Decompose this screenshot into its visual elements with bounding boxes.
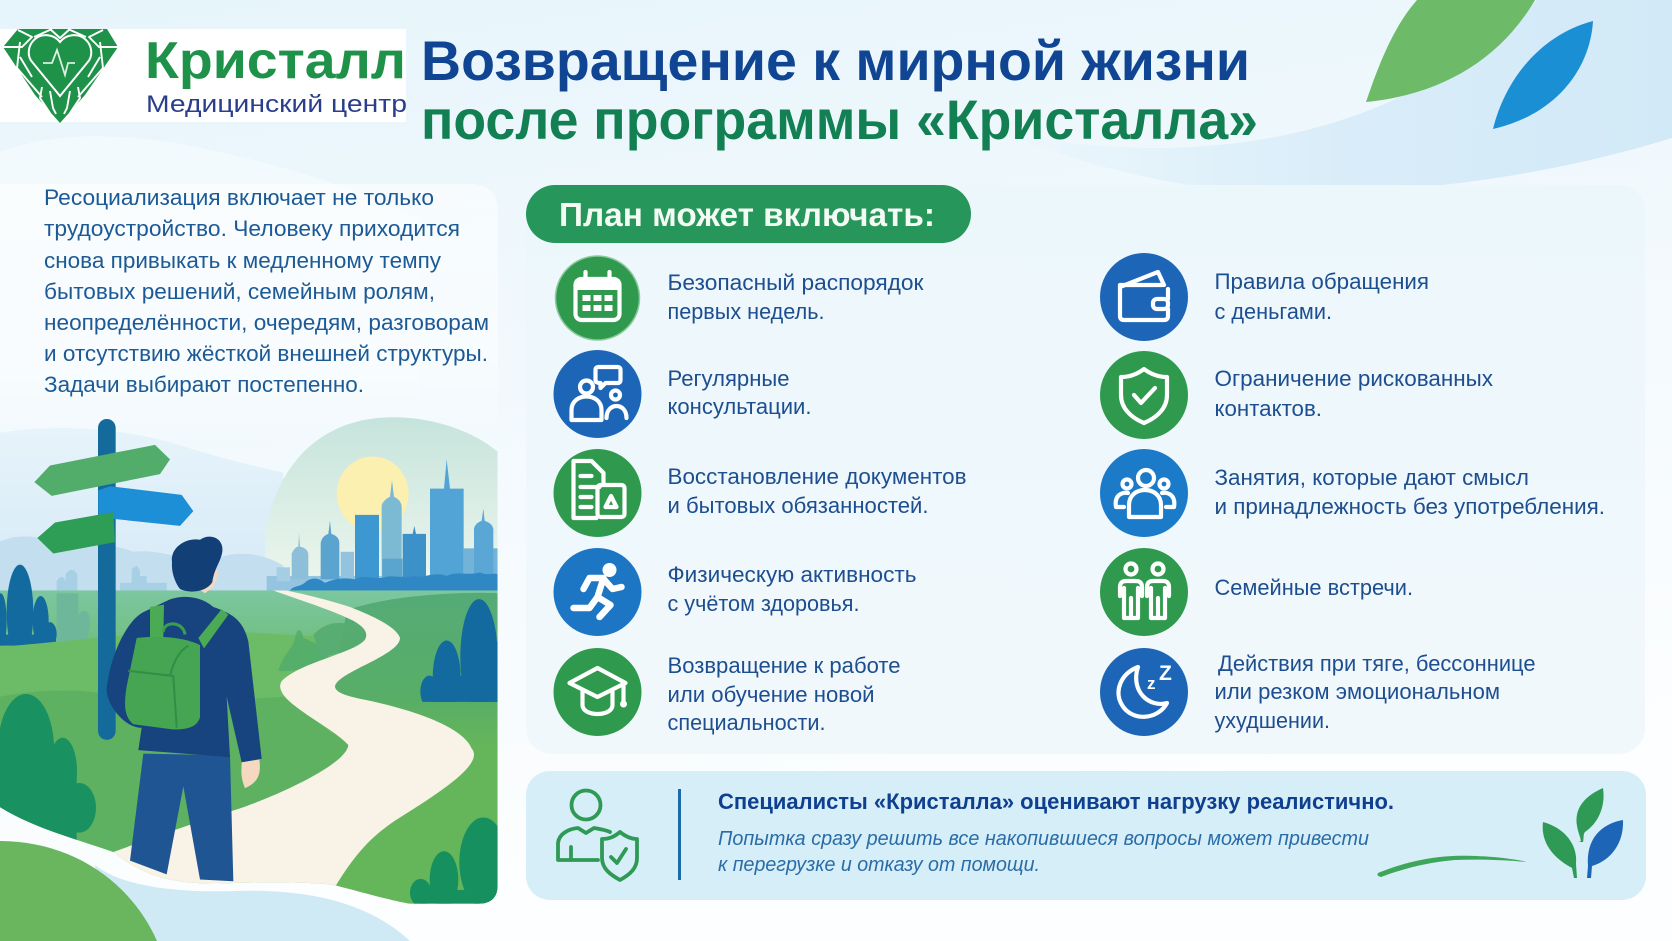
title line 1: Возвращение к мирной жизни	[421, 29, 1250, 92]
leaf: blue top right	[1493, 21, 1593, 129]
sky	[0, 428, 284, 558]
item text: Ограничение рискованных	[1214, 366, 1493, 391]
item: physical activity	[554, 548, 916, 636]
blue sign	[98, 486, 193, 526]
backpack flap	[128, 646, 188, 728]
sprout leaf top	[1577, 788, 1604, 842]
intro panel background	[0, 184, 498, 432]
icon: moon: Z	[1159, 662, 1172, 685]
top sign	[34, 445, 170, 496]
distant hills	[0, 537, 283, 593]
dark green hill left	[0, 690, 348, 852]
icon: family	[1100, 548, 1188, 636]
item text: Правила обращения	[1214, 269, 1429, 294]
item text: Физическую активность	[668, 562, 916, 587]
plan heading pill: План может включать:	[559, 196, 935, 233]
icon: moon: z	[1147, 674, 1156, 693]
person	[107, 537, 262, 881]
panel: intro text	[0, 184, 498, 432]
icon: group	[1100, 449, 1188, 537]
jacket	[107, 597, 262, 762]
item: meaningful activities	[1100, 449, 1605, 537]
backpack	[125, 637, 200, 729]
logo icon: crystal heart	[3, 29, 118, 123]
distant buildings	[57, 566, 167, 591]
item: cravings and insomnia	[1100, 648, 1536, 736]
item: cravings and insomnia: ухудшении.	[1214, 708, 1330, 733]
face	[200, 569, 218, 594]
icon: wallet	[1100, 253, 1188, 341]
corner wave: blue bottom	[95, 865, 410, 941]
background wave: top right	[1000, 0, 1672, 193]
illustration: person on a path toward the city	[0, 417, 507, 908]
title line 2: после программы «Кристалла»	[421, 88, 1258, 151]
corner hill: green bottom left	[0, 841, 157, 941]
hair	[172, 537, 222, 592]
intro paragraph: трудоустройство. Человеку приходится	[44, 216, 460, 241]
intro paragraph: неопределённости, очередям, разговорам	[44, 310, 489, 335]
dark blue bush left	[0, 564, 57, 646]
signpost	[34, 419, 193, 740]
item: consultations	[554, 350, 812, 438]
sun	[337, 457, 409, 531]
plan heading pill	[526, 185, 971, 243]
callout heading: Специалисты «Кристалла» оценивают нагрузку реалистично.	[718, 789, 1394, 814]
logo	[0, 29, 407, 123]
item: money rules: с деньгами.	[1214, 299, 1332, 324]
item text: Регулярные	[668, 366, 790, 391]
field	[0, 590, 498, 908]
item: money rules	[1100, 253, 1429, 341]
logo name: Кристалл	[145, 32, 406, 90]
callout: realistic load	[526, 771, 1646, 900]
sprout leaf blue	[1587, 820, 1623, 878]
logo subtitle: Медицинский центр	[146, 91, 407, 118]
item text: Семейные встречи.	[1214, 575, 1413, 600]
green swoosh	[1377, 856, 1527, 877]
winding path	[113, 590, 474, 890]
green bush lower right	[410, 818, 498, 904]
callout body: к перегрузке и отказу от помощи.	[718, 853, 1040, 876]
logo background	[0, 29, 406, 122]
item: work or study: или обучение новой	[668, 682, 874, 707]
plan panel background	[526, 185, 1645, 754]
lower sign	[37, 512, 115, 554]
mound near the path	[314, 623, 344, 656]
icon: people talking	[554, 350, 642, 438]
callout body	[718, 827, 1369, 876]
item: documents	[554, 449, 966, 537]
icon: shield	[1100, 351, 1188, 439]
hill right	[333, 593, 498, 904]
trousers	[130, 754, 233, 881]
green bush left	[0, 694, 96, 840]
item text: Восстановление документов	[668, 464, 966, 489]
item text: Безопасный распорядок	[668, 270, 924, 295]
intro paragraph: Задачи выбирают постепенно.	[44, 372, 364, 397]
item: work or study	[554, 648, 900, 736]
icon: moon	[1100, 648, 1188, 736]
title	[421, 29, 1258, 151]
background wave: top left	[0, 136, 420, 440]
callout divider	[678, 789, 681, 880]
intro paragraph	[44, 185, 489, 397]
item: meaningful activities: и принадлежность без употребления.	[1214, 494, 1605, 519]
post	[98, 419, 116, 740]
backpack straps	[150, 605, 228, 648]
backpack handle	[163, 624, 185, 635]
city skyline	[267, 459, 498, 591]
leaf: green top right	[1366, 0, 1535, 102]
sprout	[1543, 788, 1623, 878]
dark blue bush right	[420, 599, 498, 702]
icon: runner	[554, 548, 642, 636]
item text: Возвращение к работе	[668, 653, 900, 678]
panel: plan	[526, 185, 1645, 754]
hill behind city	[265, 417, 498, 593]
pale bush	[57, 593, 90, 642]
intro paragraph: и отсутствию жёсткой внешней структуры.	[44, 341, 488, 366]
item text: Занятия, которые дают смысл	[1214, 465, 1529, 490]
hand	[241, 759, 260, 788]
intro paragraph: Ресоциализация включает не только	[44, 185, 434, 210]
item: risky contacts	[1100, 351, 1493, 439]
callout background	[526, 771, 1646, 900]
lawn left	[0, 632, 339, 698]
intro paragraph: бытовых решений, семейным ролям,	[44, 279, 435, 304]
sprout leaf left	[1543, 822, 1577, 878]
callout body: Попытка сразу решить все накопившиеся вопросы может привести	[718, 827, 1369, 850]
icon: calendar	[556, 256, 640, 340]
distant green bush	[278, 630, 330, 671]
item: risky contacts: контактов.	[1214, 396, 1322, 421]
icon: documents	[554, 449, 642, 537]
city tree line	[289, 572, 498, 591]
item: family meetings	[1100, 548, 1413, 636]
item: consultations: консультации.	[668, 394, 812, 419]
item: daily schedule: первых недель.	[668, 299, 824, 324]
item: cravings and insomnia: или резком эмоциональном	[1214, 679, 1500, 704]
intro paragraph: снова привыкать к медленному темпу	[44, 248, 441, 273]
icon: graduation cap	[554, 648, 642, 736]
icon: specialist with shield	[558, 790, 637, 880]
item: physical activity: с учётом здоровья.	[668, 591, 860, 616]
item: work or study: специальности.	[668, 710, 826, 735]
item: documents: и бытовых обязанностей.	[668, 493, 928, 518]
item text: Действия при тяге, бессоннице	[1218, 651, 1536, 676]
item: daily schedule	[556, 256, 924, 340]
